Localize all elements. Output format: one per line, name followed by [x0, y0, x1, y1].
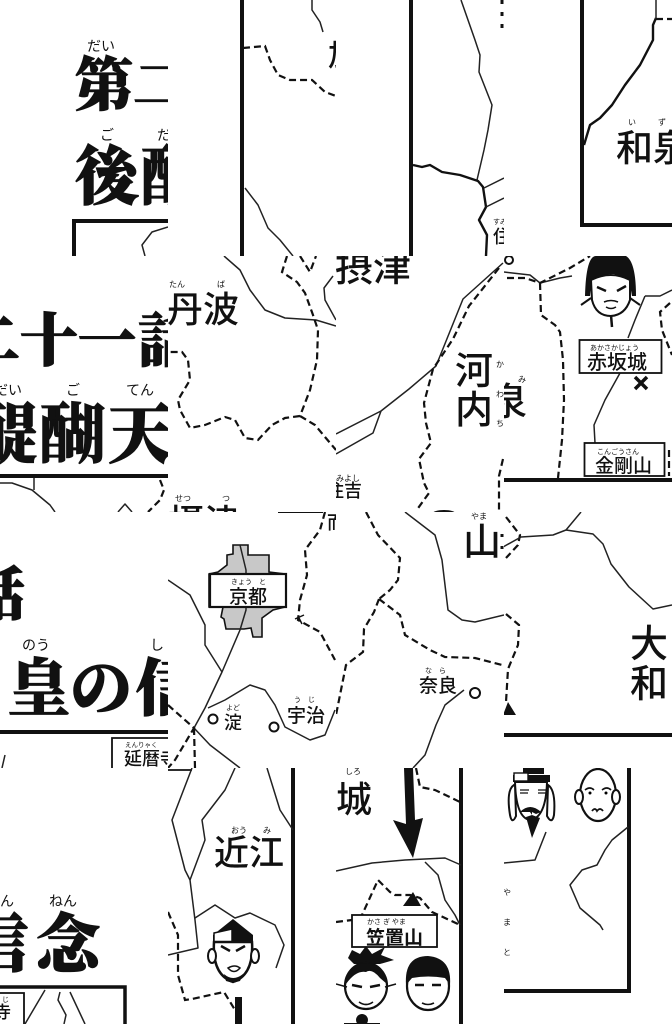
place label fragment: 城: [336, 779, 372, 820]
furigana: ご: [66, 382, 80, 398]
furigana: せつ: [175, 494, 191, 503]
province label fragment: 摂津: [168, 502, 240, 543]
furigana: な ら: [425, 667, 446, 675]
place label: Akasaka castle: 赤坂城: [587, 351, 647, 374]
icon: battle cross: [635, 377, 647, 389]
place label: Enryakuji: 延暦寺: [124, 749, 178, 769]
river: [312, 0, 323, 32]
border dots: [500, 0, 504, 30]
province label: 和: [630, 664, 668, 706]
place label: Uji: 宇治: [287, 705, 325, 727]
map frame bottom: [504, 478, 672, 482]
border: [300, 256, 316, 272]
panel: tile row 4 column 1: [0, 893, 127, 1024]
map border: [582, 0, 672, 225]
furigana: ち: [496, 419, 504, 428]
place label: Akasaka castle: あかさかじょう: [590, 344, 639, 352]
icon: mountain: [403, 892, 421, 906]
province border: [243, 46, 336, 96]
panel: tile row 2 column 2: [167, 256, 336, 543]
panel: tile row 3 column 3: [336, 512, 504, 768]
border: [507, 256, 590, 283]
panel: tile row 2 column 4: [489, 256, 672, 482]
river through Kyoto: [194, 545, 246, 768]
river: [486, 198, 504, 207]
furigana: のう: [22, 637, 50, 653]
furigana: やま: [471, 512, 487, 521]
province label: 丹波: [167, 289, 239, 330]
river outline: [655, 0, 657, 19]
icon: mountain: [503, 702, 516, 715]
river: [645, 290, 672, 296]
furigana: み: [263, 826, 271, 835]
panel: tile row 2 column 3: [326, 248, 504, 512]
map border: [291, 768, 295, 1024]
border: [282, 256, 318, 416]
province label fragment: 加: [328, 40, 358, 73]
map border: [409, 0, 413, 256]
furigana: おう: [231, 826, 247, 835]
river: [70, 992, 85, 1024]
panel: tile row 3 column 2: [168, 512, 345, 768]
border: [168, 705, 194, 768]
river: [324, 276, 336, 320]
furigana: ま: [503, 918, 511, 927]
icon: noble portrait: [208, 919, 259, 983]
furigana: か: [496, 360, 504, 369]
river: [405, 512, 504, 622]
panel: tile row 3 column 4: [504, 512, 672, 737]
place label: Akasaka castle: [580, 340, 662, 374]
place label: Kasagi mountain: 笠置山: [366, 926, 423, 949]
rule fragment: [278, 510, 323, 513]
place marker: [505, 256, 513, 264]
border: [336, 880, 460, 925]
province label: 山: [463, 522, 501, 564]
dots: [500, 534, 504, 549]
place label fragment: 而: [327, 513, 345, 533]
province label: 内: [455, 390, 493, 432]
river: [336, 263, 503, 434]
river: [413, 690, 464, 768]
arrow: [393, 768, 423, 858]
place label: Kongo mountain: こんごうさん: [597, 447, 639, 456]
furigana: みよし: [336, 474, 360, 483]
map frame bottom: [504, 733, 672, 737]
map border: [240, 0, 244, 256]
province label fragment: 摂津: [335, 248, 411, 290]
border: [194, 728, 195, 768]
place marker: [470, 688, 480, 698]
furigana: よど: [226, 704, 240, 712]
province label: 大: [630, 624, 668, 666]
panel: tile row 1 column 2: [240, 0, 358, 256]
river: [594, 373, 620, 443]
furigana: しろ: [345, 767, 361, 776]
border: [499, 459, 503, 512]
border: [506, 517, 520, 558]
panel: tile row 2 column 1: [0, 309, 196, 512]
place label: Kyoto: きょう と: [231, 578, 266, 586]
furigana: ば: [217, 280, 225, 289]
place label: 住吉: [326, 481, 362, 501]
border: [298, 512, 335, 660]
border: [300, 416, 336, 450]
panel: tile row 1 column 1: [72, 38, 205, 256]
river: [267, 768, 293, 830]
river: [504, 832, 546, 863]
city area: Kyoto: [209, 545, 285, 637]
place marker: [270, 722, 278, 732]
place label: Nara: 奈良: [419, 675, 457, 697]
panel: tile row 1 column 4: [580, 0, 672, 227]
icon: arrow shaft: [235, 997, 242, 1024]
river: [484, 178, 504, 188]
river: [58, 992, 66, 1024]
furigana: ねん: [49, 893, 77, 909]
border: [416, 768, 460, 802]
river: [425, 862, 460, 925]
river: [33, 478, 35, 490]
box fragment: [168, 769, 192, 771]
river: [0, 483, 55, 512]
furigana: と: [503, 948, 511, 957]
icon: young man portrait: [406, 956, 450, 1010]
place label: Kongo mountain: 金剛山: [595, 455, 652, 477]
border: [148, 480, 164, 512]
border: [336, 599, 379, 715]
coast: [584, 18, 656, 145]
furigana: わ: [496, 390, 504, 399]
furigana: い: [628, 118, 636, 127]
river: [195, 905, 284, 968]
river: [224, 256, 336, 326]
river: [336, 858, 461, 871]
rule: [0, 474, 168, 478]
border: [379, 599, 502, 665]
furigana: たん: [169, 280, 185, 289]
arc: [118, 504, 132, 512]
coast: [413, 165, 487, 256]
map frame: [504, 768, 629, 991]
rule: [0, 730, 168, 734]
furigana: すみ: [493, 218, 507, 226]
river: [570, 827, 628, 930]
icon: samurai portrait: [581, 256, 640, 327]
border: [168, 912, 235, 1010]
furigana: し: [150, 637, 164, 653]
furigana: ん: [0, 893, 14, 909]
tick: [295, 615, 304, 624]
panel: tile row 1 column 3: [409, 0, 511, 256]
heading: episode number start: 第二: [75, 53, 191, 118]
river: [566, 530, 672, 609]
river: [245, 188, 293, 256]
river: [504, 272, 572, 283]
place label: Enryakuji: [112, 738, 178, 769]
mark: [432, 510, 456, 518]
map frame corner: [74, 221, 168, 256]
place label fragment: [0, 993, 24, 1024]
river: [628, 296, 645, 338]
furigana: だ: [157, 127, 171, 143]
river: [168, 580, 222, 672]
border: [366, 512, 400, 599]
map frame: [0, 987, 125, 1024]
place label: Yodo: 淀: [224, 713, 242, 733]
border: [540, 283, 564, 478]
province label: 河: [455, 351, 493, 393]
place label fragment: じ: [2, 996, 9, 1004]
river: [208, 685, 335, 740]
furigana: み: [518, 375, 526, 384]
border: [170, 352, 300, 440]
place label: Kyoto: 京都: [229, 586, 267, 608]
panel: tile row 3 column 1: [0, 563, 198, 769]
furigana: てん: [126, 382, 154, 398]
furigana: う じ: [294, 696, 315, 704]
furigana: だい: [87, 38, 115, 54]
icon: young warrior portrait: [336, 946, 396, 1024]
map border: [459, 768, 463, 1024]
heading: title start: 後醍: [75, 142, 205, 213]
panel: tile row 4 column 3: [336, 767, 463, 1024]
place label: Kongo mountain: [584, 443, 664, 477]
furigana: ご: [100, 127, 114, 143]
river: [336, 411, 381, 454]
icon: monk portrait: [575, 769, 620, 821]
furigana: ず: [658, 117, 666, 127]
panel: tile row 4 column 2: [168, 768, 295, 1024]
province label fragment: 泉: [489, 382, 527, 424]
panel: tile row 4 column 4: [503, 768, 631, 993]
furigana: つ: [222, 494, 230, 503]
border: [668, 450, 670, 476]
river: [168, 768, 198, 955]
border: [416, 268, 499, 511]
heading: title: 皇の信: [8, 655, 198, 724]
place label: Kyoto: [210, 574, 286, 608]
place label: Kasagi mountain: [352, 915, 437, 949]
river: [503, 512, 581, 547]
place label: Enryakuji: えんりゃく: [125, 741, 158, 749]
river: [142, 227, 168, 256]
place label: Kasagi mountain: かさ ぎ やま: [367, 917, 406, 926]
border: [506, 614, 519, 702]
icon: elderly noble portrait: [509, 768, 554, 838]
border: [660, 303, 672, 355]
river: [2, 755, 5, 768]
place marker: [208, 714, 218, 724]
border: [656, 18, 672, 20]
river: [461, 0, 492, 180]
river: [25, 990, 45, 1024]
province label: 近江: [214, 834, 284, 873]
river: [190, 768, 235, 880]
place label fragment: 住: [493, 227, 511, 247]
furigana: や: [503, 888, 511, 897]
